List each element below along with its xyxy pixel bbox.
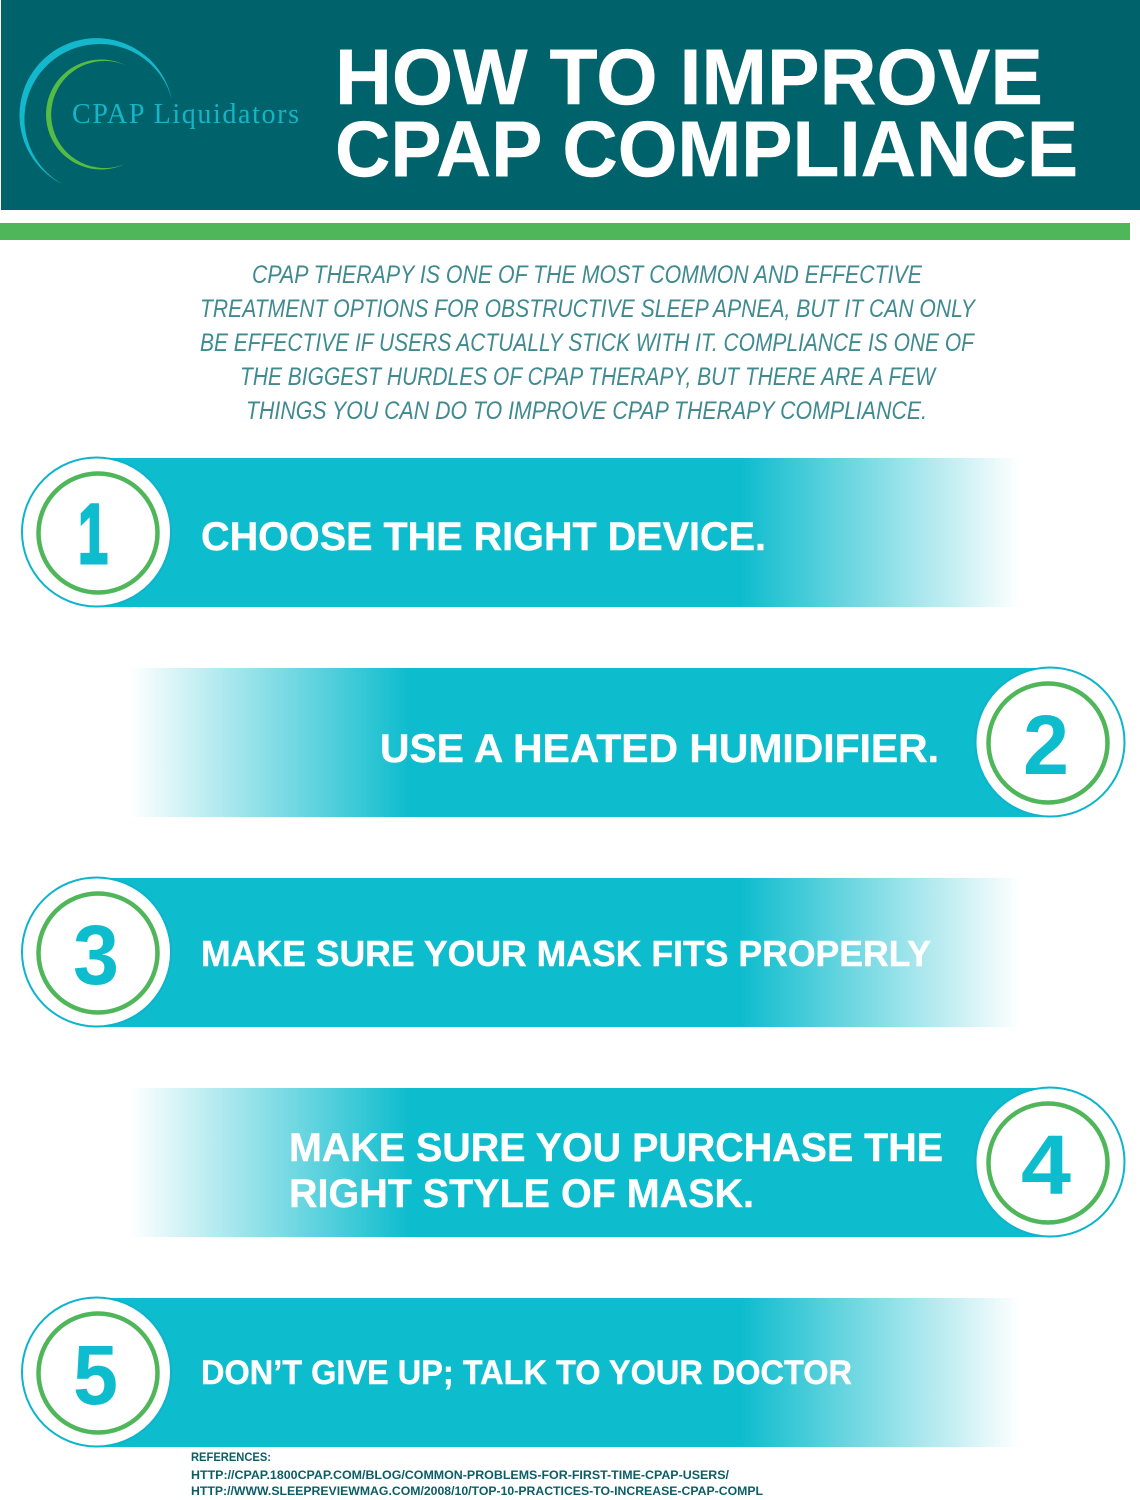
title: CPAP COMPLIANCE	[335, 104, 1078, 193]
step 4 number badge	[976, 1088, 1124, 1236]
logo: CPAP Liquidators	[20, 38, 299, 184]
step 1 label: CHOOSE THE RIGHT DEVICE.	[201, 515, 766, 559]
step 3	[22, 878, 1020, 1027]
step 5 label: DON’T GIVE UP; TALK TO YOUR DOCTOR	[201, 1354, 852, 1392]
step 3 number badge: 3	[73, 908, 119, 1002]
intro text block: TREATMENT OPTIONS FOR OBSTRUCTIVE SLEEP APNEA, BUT IT CAN ONLY	[200, 295, 977, 323]
logo: CPAP Liquidators: CPAP Liquidators	[72, 99, 299, 130]
references: HTTP://CPAP.1800CPAP.COM/BLOG/COMMON-PROBLEMS-FOR-FIRST-TIME-CPAP-USERS/	[191, 1468, 730, 1482]
step 5 number badge	[22, 1298, 171, 1446]
step 4 number badge: 4	[1021, 1118, 1071, 1212]
step 4 label: RIGHT STYLE OF MASK.	[289, 1172, 754, 1216]
step 4 label	[289, 1126, 943, 1216]
step 5	[22, 1298, 1020, 1447]
step 1 number badge	[22, 458, 171, 606]
title	[335, 32, 1078, 193]
references	[191, 1450, 763, 1498]
title: HOW TO IMPROVE	[335, 32, 1043, 121]
references: HTTP://WWW.SLEEPREVIEWMAG.COM/2008/10/TOP-10-PRACTICES-TO-INCREASE-CPAP-COMPL	[191, 1484, 763, 1498]
step 2 label: USE A HEATED HUMIDIFIER.	[380, 727, 939, 771]
header banner	[1, 0, 1140, 210]
references: REFERENCES:	[191, 1450, 271, 1464]
step 4	[130, 1088, 1124, 1237]
green divider bar	[0, 223, 1130, 240]
intro text block: BE EFFECTIVE IF USERS ACTUALLY STICK WITH IT. COMPLIANCE IS ONE OF	[200, 329, 975, 357]
step 2 number badge	[976, 668, 1124, 816]
step 4 label: MAKE SURE YOU PURCHASE THE	[289, 1126, 943, 1170]
step 3 number badge	[22, 878, 171, 1026]
step 1 number badge: 1	[78, 487, 108, 581]
intro text block: THINGS YOU CAN DO TO IMPROVE CPAP THERAPY COMPLIANCE.	[246, 397, 927, 425]
intro text block	[200, 261, 977, 425]
step 2 number badge: 2	[1023, 698, 1069, 792]
step 1	[22, 458, 1020, 607]
intro text block: CPAP THERAPY IS ONE OF THE MOST COMMON AND EFFECTIVE	[252, 261, 922, 289]
step 3 label: MAKE SURE YOUR MASK FITS PROPERLY	[201, 933, 931, 974]
step 2	[130, 668, 1124, 817]
step 5 number badge: 5	[73, 1328, 118, 1422]
intro text block: THE BIGGEST HURDLES OF CPAP THERAPY, BUT THERE ARE A FEW	[240, 363, 937, 391]
